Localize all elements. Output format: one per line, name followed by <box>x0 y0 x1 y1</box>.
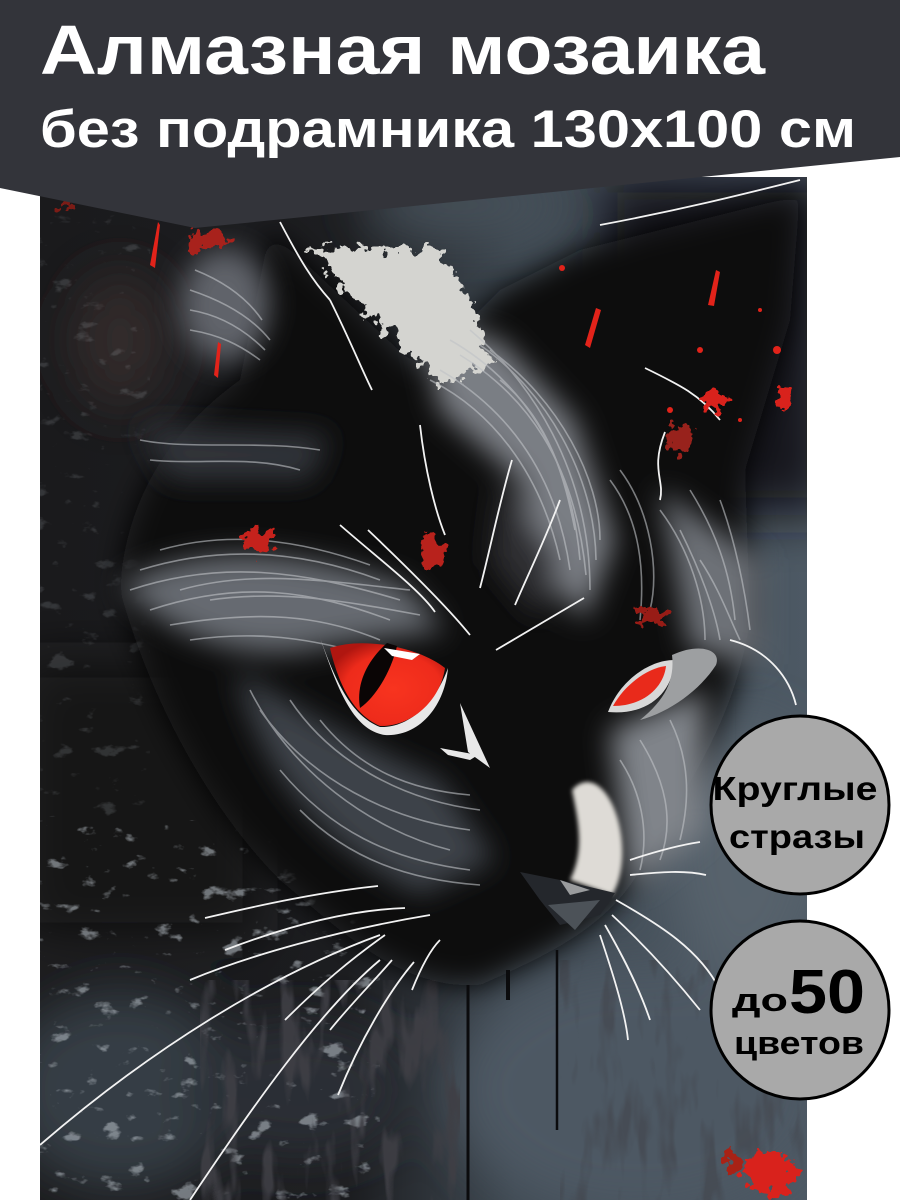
badge: up to 50 colours: цветов <box>734 1025 864 1061</box>
background paint masses <box>0 175 830 1200</box>
fur strokes <box>130 270 750 885</box>
white fur patch at top <box>310 245 490 385</box>
scraped paint texture <box>40 820 380 1200</box>
painting background <box>40 177 807 1200</box>
eye rim <box>318 632 448 735</box>
soft fur masses <box>120 249 760 895</box>
right eye <box>608 648 717 720</box>
whiskers <box>40 180 800 1200</box>
badge: up to 50 colours: до <box>732 982 788 1018</box>
drips <box>468 950 557 1200</box>
nose <box>520 872 615 930</box>
badge: round rhinestones: Круглые <box>712 770 878 807</box>
red splatters <box>52 203 796 1194</box>
badge: up to 50 colours <box>711 921 889 1099</box>
under-eye white marks <box>440 703 490 768</box>
pupil <box>359 643 397 708</box>
red paint strokes <box>150 222 781 422</box>
cat head silhouette <box>120 195 800 985</box>
badge: up to 50 colours: 50 <box>789 958 865 1027</box>
badge: round rhinestones: стразы <box>729 818 865 855</box>
cat painting <box>0 175 830 1200</box>
header banner <box>0 0 900 228</box>
eye glint <box>384 648 420 660</box>
banner shape <box>0 0 900 228</box>
nose bridge white <box>570 782 622 895</box>
left eye <box>318 632 448 735</box>
badge: round rhinestones <box>711 716 889 894</box>
subtitle: без подрамника 130х100 см <box>40 100 856 159</box>
iris <box>330 643 445 726</box>
title: Алмазная мозаика <box>40 11 766 89</box>
